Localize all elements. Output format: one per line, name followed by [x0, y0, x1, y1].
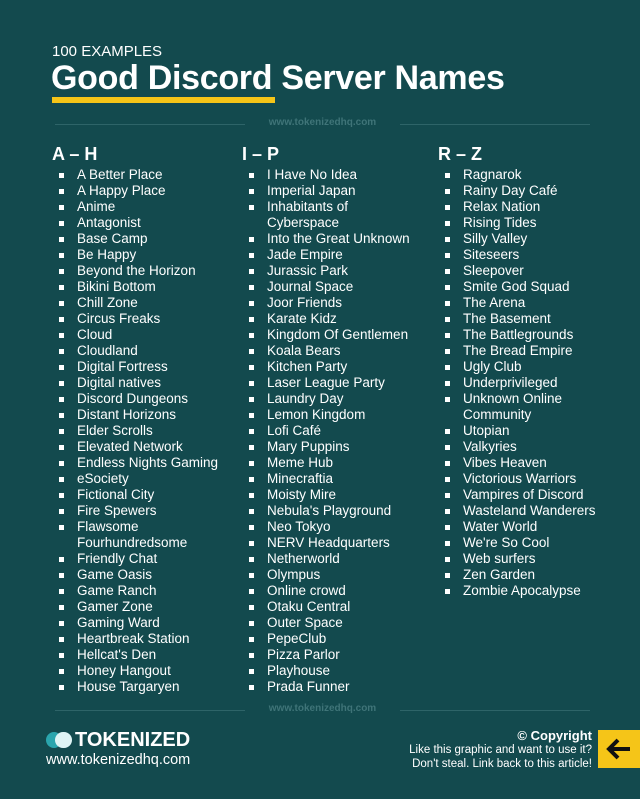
- list R-Z: [445, 167, 596, 598]
- list R-Z: Web surfers: [463, 551, 536, 566]
- list R-Z: Victorious Warriors: [463, 471, 576, 486]
- list A-H: Discord Dungeons: [77, 391, 188, 406]
- list I-P: Imperial Japan: [267, 183, 356, 198]
- list I-P: Lofi Café: [267, 423, 321, 438]
- list A-H: House Targaryen: [77, 679, 180, 694]
- heading A-H: A – H: [52, 144, 97, 164]
- list R-Z: The Battlegrounds: [463, 327, 573, 342]
- list A-H: [59, 167, 218, 694]
- logo text: TOKENIZED: [75, 729, 190, 751]
- list I-P: Prada Funner: [267, 679, 350, 694]
- list I-P: Mary Puppins: [267, 439, 350, 454]
- list R-Z: The Bread Empire: [463, 343, 573, 358]
- list I-P: Playhouse: [267, 663, 330, 678]
- list R-Z: Zombie Apocalypse: [463, 583, 581, 598]
- list R-Z: Silly Valley: [463, 231, 527, 246]
- list A-H: Game Oasis: [77, 567, 152, 582]
- list A-H: Be Happy: [77, 247, 136, 262]
- list R-Z: The Arena: [463, 295, 525, 310]
- list I-P: Olympus: [267, 567, 320, 582]
- list I-P: Otaku Central: [267, 599, 350, 614]
- list A-H: Fictional City: [77, 487, 154, 502]
- list I-P: Outer Space: [267, 615, 343, 630]
- subtitle: 100 EXAMPLES: [52, 43, 162, 60]
- list R-Z: Siteseers: [463, 247, 519, 262]
- list A-H: Honey Hangout: [77, 663, 171, 678]
- icon: arrow box: [598, 730, 640, 768]
- list A-H: Chill Zone: [77, 295, 138, 310]
- list I-P: Cyberspace: [267, 215, 339, 230]
- list A-H: Antagonist: [77, 215, 141, 230]
- list A-H: Anime: [77, 199, 115, 214]
- list I-P: Pizza Parlor: [267, 647, 340, 662]
- list R-Z: Underprivileged: [463, 375, 558, 390]
- list A-H: Gamer Zone: [77, 599, 153, 614]
- list R-Z: Unknown Online: [463, 391, 562, 406]
- watermark bottom: www.tokenizedhq.com: [269, 703, 376, 714]
- list R-Z: Rising Tides: [463, 215, 537, 230]
- heading R-Z: R – Z: [438, 144, 482, 164]
- yellow underline: [52, 97, 275, 103]
- list A-H: Circus Freaks: [77, 311, 160, 326]
- list A-H: A Happy Place: [77, 183, 166, 198]
- website url: www.tokenizedhq.com: [46, 752, 190, 768]
- list R-Z: Vampires of Discord: [463, 487, 584, 502]
- list R-Z: Sleepover: [463, 263, 524, 278]
- list A-H: eSociety: [77, 471, 129, 486]
- list R-Z: Smite God Squad: [463, 279, 570, 294]
- list I-P: Jade Empire: [267, 247, 343, 262]
- copyright text: [409, 728, 592, 770]
- list A-H: Endless Nights Gaming: [77, 455, 218, 470]
- list I-P: Kingdom Of Gentlemen: [267, 327, 408, 342]
- list I-P: Jurassic Park: [267, 263, 348, 278]
- list I-P: Netherworld: [267, 551, 340, 566]
- list R-Z: Utopian: [463, 423, 510, 438]
- heading I-P: I – P: [242, 144, 279, 164]
- logo icon: [46, 732, 72, 748]
- list I-P: Koala Bears: [267, 343, 341, 358]
- list R-Z: Community: [463, 407, 531, 422]
- list R-Z: Ragnarok: [463, 167, 522, 182]
- list I-P: Lemon Kingdom: [267, 407, 365, 422]
- list R-Z: Rainy Day Café: [463, 183, 558, 198]
- list R-Z: The Basement: [463, 311, 551, 326]
- list A-H: Cloud: [77, 327, 112, 342]
- list I-P: I Have No Idea: [267, 167, 357, 182]
- list R-Z: Wasteland Wanderers: [463, 503, 596, 518]
- list A-H: Heartbreak Station: [77, 631, 190, 646]
- list A-H: Digital Fortress: [77, 359, 168, 374]
- list A-H: A Better Place: [77, 167, 163, 182]
- list I-P: Laser League Party: [267, 375, 385, 390]
- list R-Z: Zen Garden: [463, 567, 535, 582]
- list A-H: Cloudland: [77, 343, 138, 358]
- list I-P: Minecraftia: [267, 471, 333, 486]
- list A-H: Game Ranch: [77, 583, 157, 598]
- list I-P: Joor Friends: [267, 295, 342, 310]
- list I-P: Into the Great Unknown: [267, 231, 410, 246]
- list A-H: Gaming Ward: [77, 615, 160, 630]
- list R-Z: Relax Nation: [463, 199, 540, 214]
- watermark top: www.tokenizedhq.com: [269, 117, 376, 128]
- list I-P: Online crowd: [267, 583, 346, 598]
- copyright text: Don't steal. Link back to this article!: [412, 758, 592, 770]
- list A-H: Fire Spewers: [77, 503, 157, 518]
- list I-P: Neo Tokyo: [267, 519, 331, 534]
- list I-P: [249, 167, 410, 694]
- list I-P: Inhabitants of: [267, 199, 348, 214]
- list A-H: Base Camp: [77, 231, 148, 246]
- logo: [46, 729, 190, 751]
- list I-P: Karate Kidz: [267, 311, 337, 326]
- list I-P: PepeClub: [267, 631, 326, 646]
- list I-P: Nebula's Playground: [267, 503, 391, 518]
- list A-H: Digital natives: [77, 375, 161, 390]
- list R-Z: Vibes Heaven: [463, 455, 547, 470]
- list I-P: Moisty Mire: [267, 487, 336, 502]
- list A-H: Friendly Chat: [77, 551, 157, 566]
- list R-Z: Ugly Club: [463, 359, 522, 374]
- list A-H: Elder Scrolls: [77, 423, 153, 438]
- copyright text: © Copyright: [517, 728, 592, 743]
- list A-H: Flawsome: [77, 519, 139, 534]
- list R-Z: Water World: [463, 519, 537, 534]
- list A-H: Beyond the Horizon: [77, 263, 196, 278]
- copyright text: Like this graphic and want to use it?: [409, 744, 592, 756]
- list A-H: Elevated Network: [77, 439, 183, 454]
- list I-P: Meme Hub: [267, 455, 333, 470]
- list I-P: Laundry Day: [267, 391, 344, 406]
- list A-H: Hellcat's Den: [77, 647, 156, 662]
- list R-Z: Valkyries: [463, 439, 517, 454]
- list I-P: Journal Space: [267, 279, 353, 294]
- list R-Z: We're So Cool: [463, 535, 549, 550]
- list I-P: NERV Headquarters: [267, 535, 390, 550]
- list A-H: Bikini Bottom: [77, 279, 156, 294]
- title: Good Discord Server Names: [51, 59, 505, 97]
- list A-H: Distant Horizons: [77, 407, 176, 422]
- list I-P: Kitchen Party: [267, 359, 347, 374]
- list A-H: Fourhundredsome: [77, 535, 187, 550]
